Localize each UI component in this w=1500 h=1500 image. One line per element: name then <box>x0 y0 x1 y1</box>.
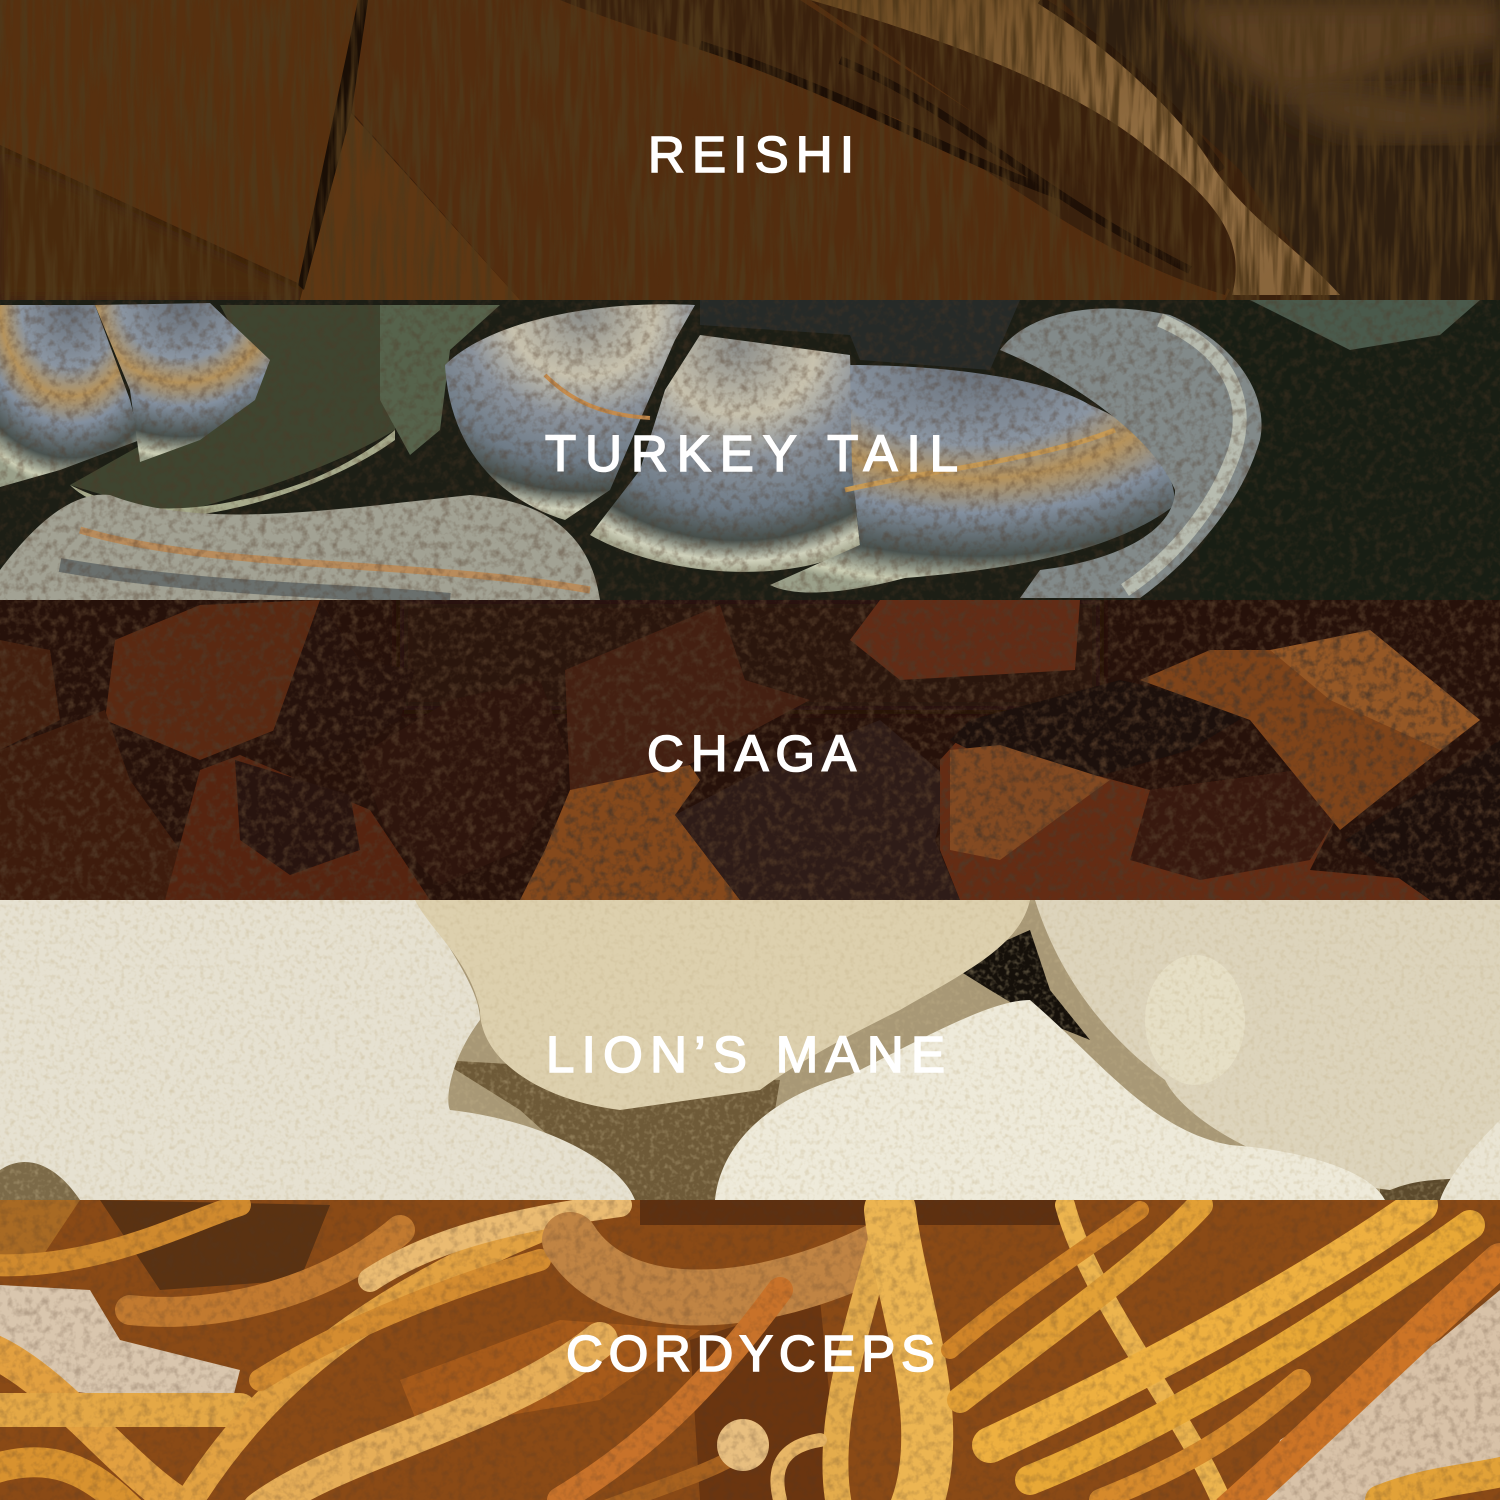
lower wedge slab <box>300 112 520 300</box>
central fans <box>445 304 695 520</box>
label: chaga: CHAGA <box>647 725 856 782</box>
band: chaga photo <box>0 600 1500 900</box>
pale background patches <box>0 1285 240 1410</box>
chunks <box>105 600 360 760</box>
green undersides <box>70 305 400 515</box>
band: cordyceps photo <box>0 1200 1500 1500</box>
label: cordyceps: CORDYCEPS <box>566 1325 935 1382</box>
small knob <box>717 1419 769 1471</box>
right mass <box>1035 900 1500 1190</box>
left fans <box>0 305 140 487</box>
band: reishi photo <box>0 0 1500 300</box>
band: lion's mane photo <box>0 900 1500 1200</box>
blurred lower left <box>0 150 300 300</box>
lower left fan <box>0 495 600 600</box>
upper middle mass <box>415 900 1030 1110</box>
strands <box>0 1205 1500 1500</box>
right dark cap area <box>1060 0 1500 300</box>
lower centre mass <box>715 1000 1385 1200</box>
label: reishi: REISHI <box>648 126 854 183</box>
tan fungus lip <box>810 0 1340 295</box>
left mass <box>0 900 635 1200</box>
band: turkey tail photo <box>0 300 1500 600</box>
label: turkey tail: TURKEY TAIL <box>545 425 958 482</box>
brown gaps <box>440 1060 780 1200</box>
dark mossy right <box>1200 300 1500 600</box>
centre wood slab <box>350 0 1230 300</box>
dark crack <box>298 0 368 290</box>
label: lion's mane: LION’S MANE <box>546 1026 945 1083</box>
upper bark strip <box>560 0 1230 295</box>
dark gaps <box>100 1200 330 1290</box>
knob <box>1145 955 1245 1085</box>
left wood slab <box>0 0 362 285</box>
